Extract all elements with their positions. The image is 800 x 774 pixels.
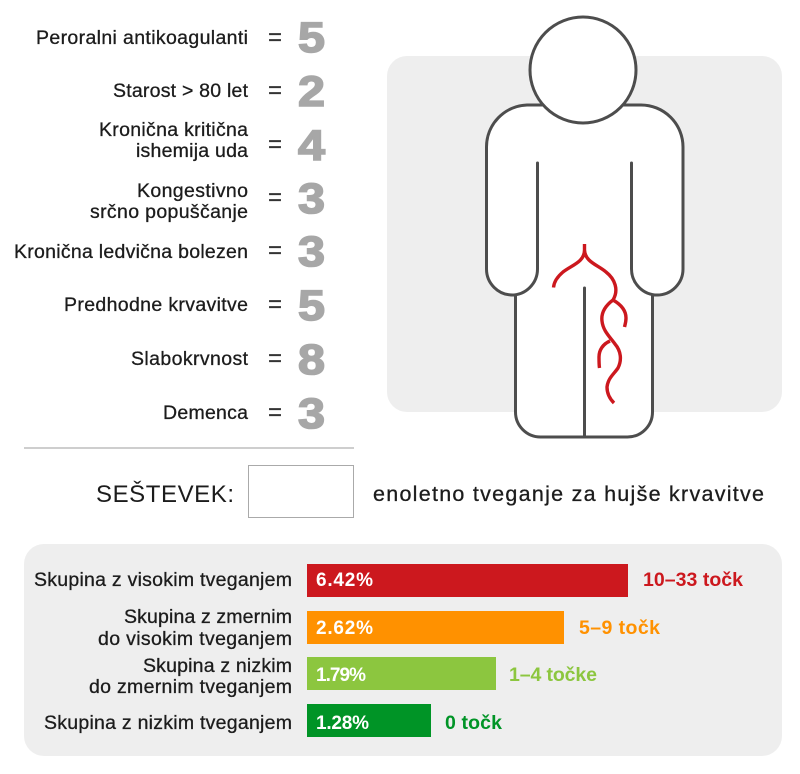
- factor: heart failure: [90, 175, 325, 223]
- factor: dementia: 3: [298, 390, 325, 438]
- factor: anemia: 8: [298, 336, 325, 384]
- factor: limb ischemia: [99, 119, 325, 170]
- factor: previous bleeding: [64, 282, 325, 330]
- factor: age: Starost > 80 let: [113, 80, 249, 102]
- group: moderate to high risk: [98, 606, 660, 650]
- risk factors list: [14, 14, 325, 438]
- factor: limb ischemia: Kronična kritična: [99, 119, 248, 141]
- group: moderate to high risk: 2.62%: [316, 618, 373, 639]
- factor: oral anticoagulants: 5: [298, 14, 325, 62]
- group: low risk: 1.28%: [316, 713, 369, 734]
- group: moderate to high risk: do visokim tveganjem: [98, 628, 292, 650]
- factor: limb ischemia: 4: [298, 122, 325, 170]
- factor: previous bleeding: 5: [298, 282, 325, 330]
- total input box: [248, 466, 354, 518]
- factor: heart failure: =: [268, 184, 282, 211]
- one-year risk label: enoletno tveganje za hujše krvavitve: [373, 482, 764, 506]
- factor: kidney disease: 3: [298, 228, 325, 276]
- group: low risk: Skupina z nizkim tveganjem: [44, 712, 292, 734]
- factor: oral anticoagulants: =: [268, 24, 282, 51]
- factor: dementia: Demenca: [163, 402, 248, 424]
- factor: age: [113, 68, 325, 116]
- panel: body background: [387, 56, 782, 412]
- factor: previous bleeding: =: [268, 291, 282, 318]
- factor: previous bleeding: Predhodne krvavitve: [64, 294, 248, 316]
- factor: kidney disease: [14, 228, 325, 276]
- group: low to moderate risk: do zmernim tveganjem: [89, 676, 292, 698]
- factor: heart failure: 3: [298, 175, 325, 223]
- factor: limb ischemia: =: [268, 131, 282, 158]
- group: low to moderate risk: 1.79%: [316, 665, 366, 686]
- factor: dementia: [163, 390, 325, 438]
- risk bar chart: [34, 564, 743, 737]
- group: low risk: [44, 704, 502, 737]
- divider: [24, 447, 354, 449]
- factor: oral anticoagulants: [36, 14, 325, 62]
- group: low to moderate risk: [89, 655, 597, 698]
- group: low to moderate risk: 1–4 točke: [509, 664, 597, 686]
- factor: kidney disease: =: [268, 237, 282, 264]
- factor: age: =: [268, 77, 282, 104]
- group: high risk: [34, 564, 743, 597]
- factor: anemia: [131, 336, 325, 384]
- factor: dementia: =: [268, 399, 282, 426]
- group: high risk: Skupina z visokim tveganjem: [34, 569, 292, 591]
- group: low risk: 0 točk: [445, 712, 502, 734]
- group: high risk: 6.42%: [316, 570, 373, 591]
- factor: heart failure: srčno popuščanje: [90, 201, 248, 223]
- icon: red artery branches: [554, 244, 626, 403]
- factor: age: 2: [298, 68, 325, 116]
- group: moderate to high risk: 5–9 točk: [579, 617, 660, 639]
- factor: anemia: Slabokrvnost: [131, 348, 249, 370]
- factor: heart failure: Kongestivno: [137, 180, 248, 202]
- panel: risk groups: [24, 544, 782, 756]
- group: low to moderate risk: Skupina z nizkim: [143, 655, 292, 677]
- factor: anemia: =: [268, 345, 282, 372]
- factor: oral anticoagulants: Peroralni antikoagulanti: [36, 27, 248, 49]
- group: moderate to high risk: Skupina z zmernim: [124, 606, 292, 628]
- total label: SEŠTEVEK:: [96, 480, 234, 508]
- factor: limb ischemia: ishemija uda: [136, 140, 248, 162]
- icon: human body outline: [486, 17, 683, 437]
- factor: kidney disease: Kronična ledvična bolezen: [14, 241, 248, 263]
- group: high risk: 10–33 točk: [643, 569, 743, 591]
